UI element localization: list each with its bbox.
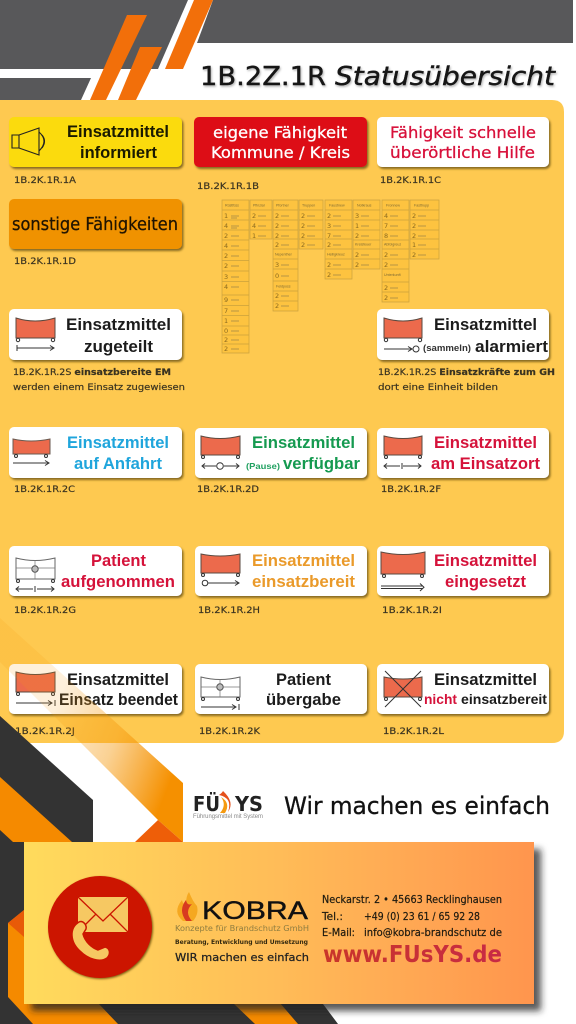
chart: miniature unit table: Pfortner: [276, 204, 290, 208]
label: 2F: 1B.2K.1R.2F: [381, 485, 441, 495]
logo: Kobra: Konzepte für Brandschutz GmbH: [175, 924, 309, 933]
chart: miniature unit table: Fasttrupp: [414, 204, 429, 208]
status card: einsatzbereit: Einsatzmittel: [252, 552, 355, 570]
logo: Kobra: WIR machen es einfach: [175, 951, 309, 964]
status card: am Einsatzort: Einsatzmittel: [434, 434, 537, 452]
FüSys logo: Führungsmittel mit System: [193, 814, 263, 820]
status card: Einsatzmittel informiert: [9, 117, 182, 167]
status card: Einsatzmittel zugeteilt: Einsatzmittel: [66, 315, 171, 334]
status card: sonstige Fähigkeiten: [9, 199, 182, 249]
status card: am Einsatzort: am Einsatzort: [431, 455, 540, 473]
status card: auf Anfahrt: [9, 427, 182, 478]
label: 2K: 1B.2K.1R.2K: [199, 727, 260, 737]
status card: Einsatzmittel informiert: informiert: [80, 144, 157, 162]
status card: eigene Fähigkeit: Kommune / Kreis: [211, 143, 350, 162]
status card: nicht einsatzbereit: nicht: [424, 691, 457, 707]
status card: Einsatzmittel alarmiert: [377, 309, 549, 360]
title: [200, 62, 556, 92]
status card: Einsatz beendet: Einsatzmittel: [67, 671, 169, 689]
status card: Fähigkeit schnelle: Fähigkeit schnelle: [390, 123, 536, 142]
status card: verfügbar: (Pause): [246, 461, 280, 471]
FüSys logo: YS: [234, 792, 263, 816]
text block: contact details: +49 (0) 23 61 / 65 92 28: [364, 911, 480, 923]
icon: unit sign with gathering arrow: [384, 318, 422, 352]
text block: contact details: info@kobra-brandschutz de: [364, 927, 502, 939]
icon: patient handover: [201, 677, 240, 710]
icon: flame: [219, 791, 231, 812]
label: alarmiert description: [378, 368, 555, 393]
chart: miniature unit table: 22223022: [275, 212, 279, 310]
status card: Einsatz beendet: [9, 664, 182, 714]
top header graphic: grey bands and orange stripes: [0, 0, 573, 100]
status card: eingesetzt: eingesetzt: [445, 573, 527, 591]
status card: Einsatzmittel zugeteilt: [9, 309, 182, 360]
status card: einsatzbereit: einsatzbereit: [252, 573, 356, 591]
slogan: Wir machen es einfach: [284, 792, 550, 820]
chart: miniature unit table: 31222: [355, 212, 359, 269]
status card: Einsatzmittel alarmiert: alarmiert: [475, 337, 548, 356]
status card: auf Anfahrt: auf Anfahrt: [74, 455, 163, 473]
status card: Fähigkeit schnelle: überörtliche Hilfe: [390, 143, 535, 162]
chart: miniature unit table: Pfinzial: [253, 204, 265, 208]
chart: miniature unit table: [222, 200, 439, 353]
label: zugeteilt description: [13, 368, 185, 393]
status card: Einsatzmittel informiert: Einsatzmittel: [67, 123, 169, 141]
text block: contact details: Tel.:: [321, 911, 343, 923]
icon: unit finished: [16, 672, 55, 706]
FüSys logo: [193, 791, 263, 820]
status card: verfügbar: Einsatzmittel: [252, 434, 355, 452]
label: 1A: 1B.2K.1R.1A: [14, 176, 76, 186]
label: zugeteilt description: werden einem Einsatz zugewiesen: [13, 383, 185, 393]
status card: am Einsatzort: [377, 428, 549, 478]
logo: Kobra: KOBRA: [202, 897, 308, 925]
label: 1D: 1B.2K.1R.1D: [14, 257, 77, 267]
status card: Patient aufgenommen: [9, 546, 182, 596]
title: Statusübersicht: [335, 62, 556, 92]
icon: unit sign with assignment arrow: [16, 318, 55, 351]
label: 2L: 1B.2K.1R.2L: [383, 727, 444, 737]
text block: contact details: Neckarstr. 2 • 45663 Recklinghausen: [322, 894, 502, 906]
status card: eigene Fähigkeit: [194, 117, 367, 167]
status card: nicht einsatzbereit: einsatzbereit: [461, 691, 547, 707]
status card: auf Anfahrt: Einsatzmittel: [67, 434, 169, 452]
status card: eingesetzt: [377, 546, 549, 596]
status card: Einsatzmittel alarmiert: Einsatzmittel: [434, 315, 537, 334]
logo: Kobra: [175, 892, 309, 964]
text block: contact details: [321, 894, 502, 939]
label: 2G: 1B.2K.1R.2G: [14, 606, 76, 616]
chart: miniature unit table: Rüstfüss: [225, 204, 239, 208]
text block: contact details: E-Mail:: [322, 927, 355, 939]
chart: miniature unit table: 241: [252, 212, 256, 240]
chart: miniature unit table: Kreisfeuer: [355, 242, 372, 246]
icon: unit on site: [384, 436, 422, 469]
chart: miniature unit table: Feldposs: [276, 284, 291, 288]
website address: www.FUsYS.de: [323, 942, 502, 968]
status card: Patient übergabe: [195, 664, 367, 714]
status card: verfügbar: verfügbar: [283, 455, 361, 473]
label: 1B: 1B.2K.1R.1B: [197, 182, 259, 192]
icon: mail and phone in red circle: [48, 876, 152, 978]
chart: miniature unit table: Unterkunft: [384, 273, 401, 277]
chart: miniature unit table: Fronnew: [386, 204, 400, 208]
status card: einsatzbereit: [195, 546, 367, 596]
chart: miniature unit table: 22212: [412, 212, 416, 259]
chart: miniature unit table: Heiligkreuz: [327, 252, 345, 256]
status card: Einsatz beendet: Einsatz beendet: [59, 691, 178, 709]
icon: patient sign: [16, 558, 55, 592]
label: 2H: 1B.2K.1R.2H: [198, 606, 260, 616]
chart: miniature unit table: 4782222: [384, 212, 388, 302]
status card: eigene Fähigkeit: eigene Fähigkeit: [213, 123, 347, 142]
status card: nicht einsatzbereit: [377, 664, 549, 714]
label: 2I: 1B.2K.1R.2I: [382, 606, 442, 616]
logo: Kobra: Beratung, Entwicklung und Umsetzung: [175, 938, 308, 946]
status card: Einsatzmittel zugeteilt: zugeteilt: [84, 337, 153, 356]
status card: verfügbar: [195, 428, 367, 478]
label: 2J: 1B.2K.1R.2J: [15, 727, 75, 737]
status card: Patient aufgenommen: aufgenommen: [61, 573, 175, 591]
icon: megaphone: [12, 128, 44, 155]
chart: miniature unit table: 14242234971022: [224, 212, 228, 353]
chart: miniature unit table: Faustnew: [329, 204, 345, 208]
status card: Fähigkeit schnelle: [377, 117, 549, 167]
status card: Patient übergabe: Patient: [276, 671, 332, 689]
icon: unit deployed: [381, 552, 425, 591]
label: alarmiert description: dort eine Einheit bilden: [378, 383, 498, 393]
chart: miniature unit table: Notkraus: [357, 204, 372, 208]
status card: eingesetzt: Einsatzmittel: [434, 552, 537, 570]
label: zugeteilt description: 1B.2K.1R.2S einsatzbereite EM: [13, 368, 171, 378]
FüSys logo: FÜ: [193, 792, 220, 816]
panel: contact footer: [24, 842, 534, 1004]
lower left decorative diagonal bands: [0, 618, 338, 1024]
status card: sonstige Fähigkeiten: sonstige Fähigkeiten: [12, 214, 178, 235]
icon: unit ready: [201, 554, 240, 586]
icon: unit crossed out: [384, 671, 422, 707]
icon: unit available: [201, 436, 240, 469]
label: 1C: 1B.2K.1R.1C: [380, 176, 441, 186]
panel: status overview background: [0, 100, 564, 743]
chart: miniature unit table: Nepenther: [275, 252, 293, 256]
label: 2C: 1B.2K.1R.2C: [14, 485, 75, 495]
status card: Patient übergabe: übergabe: [266, 691, 341, 709]
label: alarmiert description: 1B.2K.1R.2S Einsatzkräfte zum GH: [378, 368, 555, 378]
chart: miniature unit table: 2222: [301, 212, 305, 249]
status card: Patient aufgenommen: Patient: [91, 552, 147, 570]
title: 1B.2Z.1R: [200, 62, 326, 92]
status card: nicht einsatzbereit: Einsatzmittel: [434, 671, 537, 689]
icon: unit on the way: [13, 439, 50, 466]
status card: Einsatzmittel alarmiert: (sammeln): [423, 343, 471, 354]
chart: miniature unit table: Abfolgreuz: [384, 242, 401, 246]
chart: miniature unit table: Truppen: [302, 204, 315, 208]
chart: miniature unit table: 237222: [327, 212, 331, 279]
label: 2D: 1B.2K.1R.2D: [197, 485, 260, 495]
